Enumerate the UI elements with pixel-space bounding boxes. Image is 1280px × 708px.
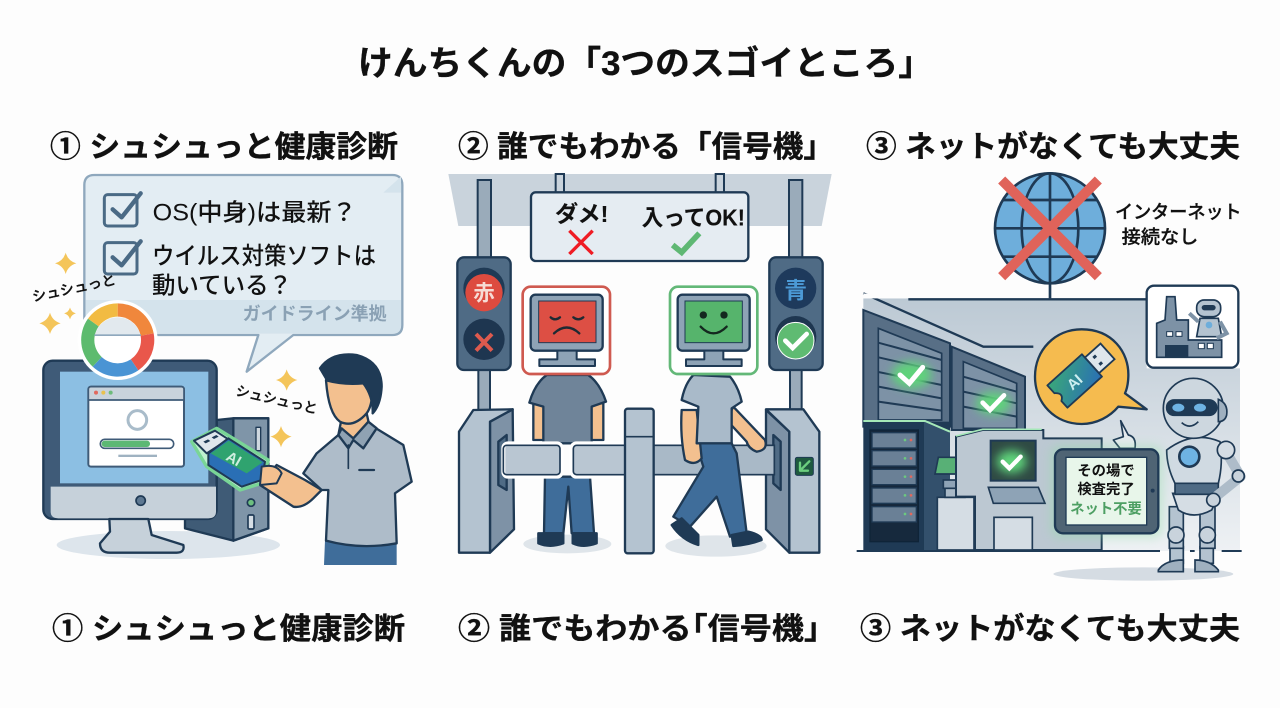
- tablet text: その場で: [1077, 463, 1135, 480]
- neck: [338, 413, 370, 442]
- face: [326, 380, 372, 424]
- right traffic light: [769, 257, 823, 370]
- back server rack left: [863, 310, 950, 427]
- heading: panel 3: ③ ネットがなくても大丈夫: [866, 130, 1240, 164]
- hair: [320, 354, 382, 413]
- caption 1: ① シュシュっと健康診断: [52, 613, 405, 646]
- sparkles: [39, 253, 297, 447]
- desk shadow: [57, 531, 280, 559]
- panel: offline: [857, 130, 1244, 646]
- heading: panel 1: ① シュシュっと健康診断: [50, 131, 398, 164]
- factory robot inset: [1147, 286, 1238, 368]
- tablet text: ネット不要: [1070, 501, 1142, 518]
- factory wall: [863, 298, 1240, 551]
- guideline label: ガイドライン準拠: [243, 303, 387, 324]
- app window: [88, 387, 184, 467]
- glow check: [976, 392, 1011, 415]
- center gate post: [625, 409, 654, 553]
- globe with cross: [995, 173, 1105, 299]
- floor shadows: [523, 535, 767, 557]
- pointing hand: [1113, 421, 1135, 448]
- inspection machine: [956, 429, 1102, 550]
- pants: [324, 541, 397, 565]
- no internet label: [1115, 201, 1242, 247]
- panel: health check: [31, 131, 412, 646]
- usb label: AI: [223, 449, 244, 470]
- floor line: [857, 548, 1242, 554]
- speech bubble checklist: [84, 175, 402, 372]
- shirt: [303, 427, 412, 546]
- no internet label: インターネット: [1115, 201, 1242, 222]
- happy monitor frame: [670, 287, 757, 374]
- forearm: [260, 465, 322, 507]
- sign board: [531, 192, 748, 261]
- illustration: offline factory: [857, 173, 1244, 581]
- checkbox 2: [104, 241, 141, 274]
- back server rack right: [952, 347, 1025, 430]
- caption 2: ② 誰でもわかる｢信号機｣: [458, 613, 820, 646]
- sound text left: シュシュっと: [31, 271, 117, 305]
- checklist text: 動いている？: [152, 272, 292, 299]
- donut status badge: [78, 300, 158, 380]
- sad monitor frame: [523, 287, 610, 374]
- checklist text: OS(中身)は最新？: [153, 199, 357, 226]
- glow check: [892, 362, 932, 388]
- checklist text: [152, 199, 376, 299]
- collar: [338, 422, 377, 448]
- tablet text: 検査完了: [1077, 480, 1135, 498]
- left traffic light: [457, 257, 511, 370]
- usb stick: [192, 428, 282, 490]
- roof: [448, 174, 832, 226]
- tablet: [1050, 445, 1163, 538]
- left traffic light: 赤: [473, 281, 495, 305]
- green check: [673, 233, 699, 252]
- walking person: [672, 375, 766, 546]
- no internet label: 接続なし: [1122, 226, 1198, 247]
- robot: [1158, 378, 1244, 572]
- monitor: [43, 361, 217, 553]
- poles: [478, 174, 802, 421]
- kiosk terminal: [935, 457, 974, 550]
- illustration: gate: [448, 174, 832, 557]
- happy face: [700, 311, 728, 333]
- usb icon: AI: [1064, 371, 1086, 394]
- pc tower: [185, 418, 268, 541]
- red cross: [569, 231, 593, 254]
- barrier paddles: [503, 443, 774, 477]
- heading: panel 2: ② 誰でもわかる「信号機」: [458, 131, 834, 164]
- checkbox 1: [104, 193, 141, 226]
- title: けんちくんの「3つのスゴイところ」: [358, 44, 933, 83]
- sad face: [551, 317, 583, 333]
- arrow marker: [795, 457, 813, 475]
- glow check: [997, 450, 1027, 473]
- right traffic light: 青: [784, 277, 807, 303]
- tablet text: [1070, 463, 1142, 518]
- front server cabinet: [863, 421, 950, 550]
- illustration: health check: [31, 175, 412, 565]
- sign text: no: ダメ!: [555, 201, 608, 227]
- ai speech bubble: [1035, 329, 1147, 424]
- left gate: [459, 409, 514, 553]
- fingers: [260, 466, 282, 485]
- panel: traffic light: [448, 131, 834, 646]
- caption 3: ③ ネットがなくても大丈夫: [860, 612, 1240, 646]
- person: [260, 354, 412, 565]
- stopped person: [529, 375, 606, 546]
- checklist text: ウイルス対策ソフトは: [152, 243, 376, 270]
- right gate: [766, 409, 819, 553]
- sound text right: シュシュっと: [234, 382, 319, 417]
- sign text: ok: 入ってOK!: [642, 204, 745, 230]
- robot shadow: [1053, 567, 1233, 581]
